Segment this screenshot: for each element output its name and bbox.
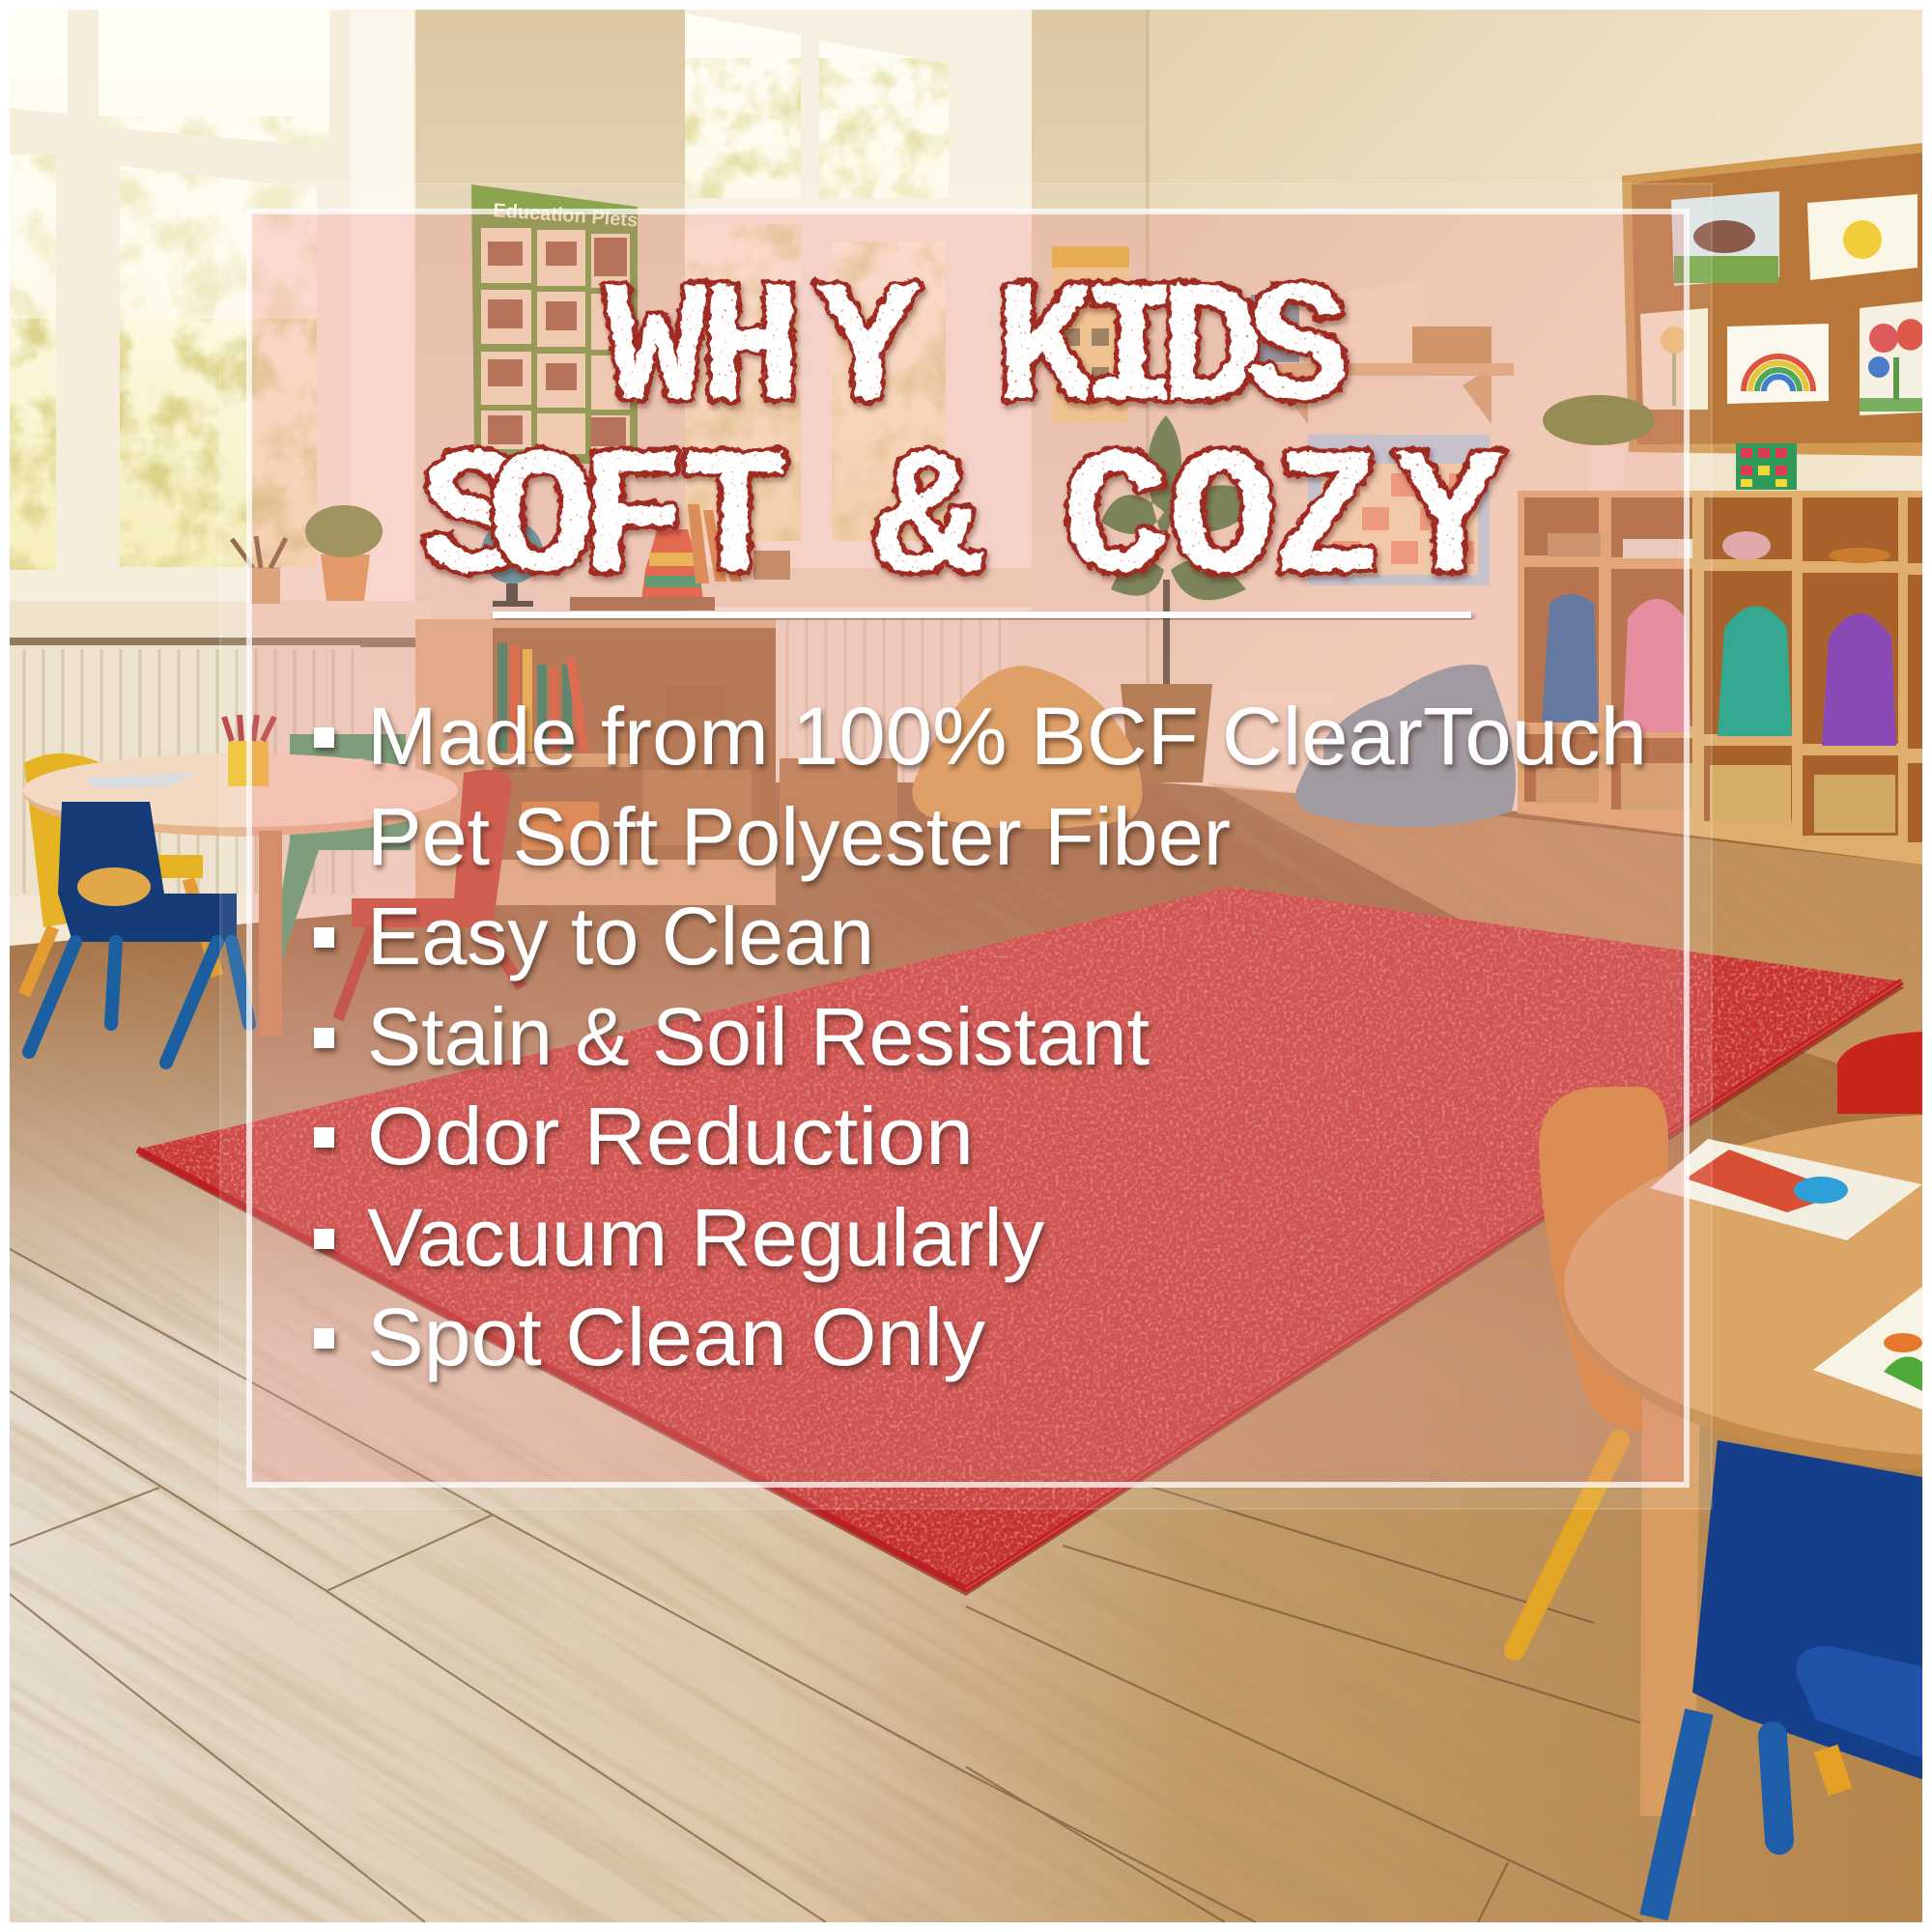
yellow wall poster — [1052, 246, 1129, 422]
calendar poster — [1308, 435, 1490, 585]
floor — [0, 782, 1932, 1932]
item: stain resistant: Stain & Soil Resistant — [367, 991, 1150, 1082]
left table with chairs — [23, 715, 522, 1063]
cubby shelves — [1518, 491, 1922, 865]
blue chair — [58, 802, 237, 942]
red rug — [97, 850, 1932, 1623]
title — [420, 256, 1503, 624]
title underline — [493, 611, 1471, 618]
item: spot clean only: Spot Clean Only — [367, 1292, 985, 1382]
backpack purple — [1822, 613, 1896, 746]
backpack blue — [1542, 594, 1599, 723]
panel outer ring — [220, 184, 1712, 1509]
table leg — [1640, 1367, 1700, 1816]
item: easy to clean: Easy to Clean — [367, 891, 874, 981]
glass panel — [220, 184, 1712, 1509]
green education poster — [471, 185, 639, 469]
title: WHY KIDS — [605, 256, 1350, 450]
panel tint — [249, 212, 1687, 1485]
corkboard with drawings — [1622, 143, 1922, 456]
backpack pink — [1623, 599, 1690, 732]
green education poster: Education Plets — [493, 200, 639, 231]
sill pots — [232, 505, 383, 604]
yellow chair — [24, 753, 101, 927]
red chair back — [1837, 1032, 1922, 1114]
item: fiber — [314, 691, 1647, 882]
radiators — [10, 618, 1008, 896]
item: fiber: Made from 100% BCF ClearTouch — [367, 691, 1647, 781]
back and side walls — [0, 0, 1932, 966]
book two — [1813, 1287, 1922, 1409]
centre window — [541, 0, 1043, 618]
backpack teal — [1718, 607, 1792, 736]
title: SOFT & COZY — [420, 421, 1503, 624]
big plant — [1101, 415, 1262, 782]
small plant and block cube — [1543, 395, 1797, 497]
left window — [0, 0, 431, 647]
table top — [1563, 1115, 1922, 1470]
foreground right table with chairs — [1515, 1032, 1922, 1918]
panel inner — [249, 212, 1687, 1485]
item: vacuum regularly: Vacuum Regularly — [367, 1192, 1044, 1283]
beanbags and stool — [912, 665, 1517, 829]
sill toys, globe and books — [481, 504, 790, 611]
green chair — [270, 734, 411, 966]
wall shelf with objects — [1251, 295, 1514, 424]
blue chair front — [1692, 1440, 1922, 1779]
item: odor reduction: Odor Reduction — [367, 1091, 974, 1181]
cubby baskets and items — [1536, 531, 1895, 833]
item: fiber: Pet Soft Polyester Fiber — [367, 791, 1231, 882]
book one — [1650, 1139, 1922, 1240]
red chair — [352, 770, 512, 927]
orange chair — [1539, 1087, 1668, 1432]
low bookcase — [415, 619, 897, 905]
table — [23, 753, 458, 837]
feature list — [314, 691, 1647, 1382]
